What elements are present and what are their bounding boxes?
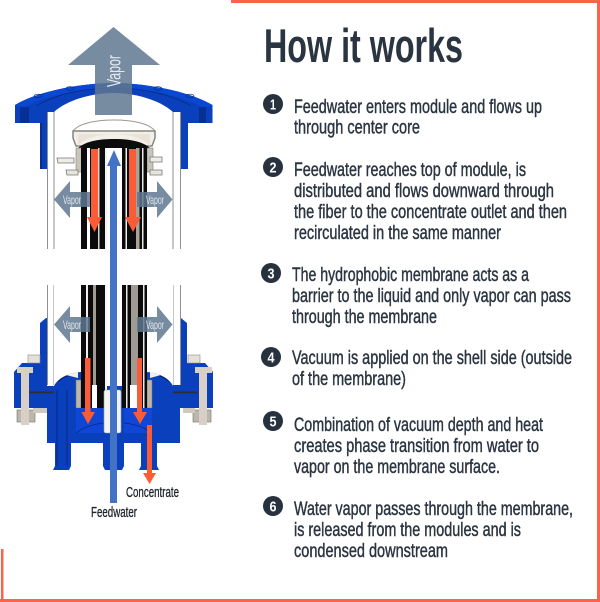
arrow: flow down upper right	[125, 149, 141, 232]
distributor sockets and core plug	[76, 390, 152, 433]
step 3	[261, 263, 571, 328]
bolts	[17, 355, 212, 425]
fibers lower	[81, 285, 147, 408]
lower housing	[14, 285, 213, 470]
arrow: vapor lower left	[54, 306, 90, 343]
fibers upper	[81, 148, 147, 249]
step 4	[261, 347, 572, 390]
step 1	[263, 94, 542, 138]
step 6: is released from the modules and is	[294, 520, 521, 541]
step 1: through center core	[294, 118, 420, 138]
arrow: vapor lower right: Vapor	[146, 318, 164, 332]
arrow: vapor lower right	[137, 306, 172, 343]
arrow: vapor lower left: Vapor	[63, 318, 81, 332]
arrow: large vapor: Vapor	[104, 55, 126, 87]
arrow: vapor upper left	[54, 181, 90, 218]
step 2: Feedwater reaches top of module, is	[294, 160, 526, 181]
top flange	[15, 83, 212, 169]
arrow: large vapor	[68, 27, 160, 115]
arrow: vapor upper right: Vapor	[146, 193, 164, 207]
step 6: condensed downstream	[294, 541, 448, 562]
step 6	[263, 496, 573, 562]
title: How it works	[264, 19, 463, 72]
arrow: flow down lower left	[82, 358, 95, 424]
arrow: feedwater	[107, 150, 121, 503]
step 5: 5	[270, 414, 276, 430]
module head	[57, 120, 162, 175]
step 2: recirculated in the same manner	[294, 223, 502, 244]
step 6: 6	[270, 498, 276, 516]
arrow: vapor upper left: Vapor	[63, 193, 81, 207]
arrow: vapor upper right	[137, 181, 172, 218]
step 3: through the membrane	[292, 307, 437, 328]
step 2	[263, 157, 567, 244]
label: concentrate: Concentrate	[126, 484, 179, 501]
shell walls upper	[48, 112, 180, 249]
module diagram	[14, 27, 213, 503]
step 1: 1	[270, 96, 276, 114]
step 3: 3	[268, 266, 274, 282]
step 4: 4	[268, 350, 275, 366]
step 4: of the membrane)	[292, 369, 406, 390]
step 5: vapor on the membrane surface.	[294, 457, 500, 478]
arrow: flow down lower right	[133, 358, 147, 424]
step 2: 2	[270, 160, 276, 176]
label: feedwater: Feedwater	[91, 504, 137, 521]
arrow: concentrate	[143, 425, 156, 484]
arrow: flow down upper left	[87, 149, 102, 232]
step 5	[263, 411, 544, 478]
